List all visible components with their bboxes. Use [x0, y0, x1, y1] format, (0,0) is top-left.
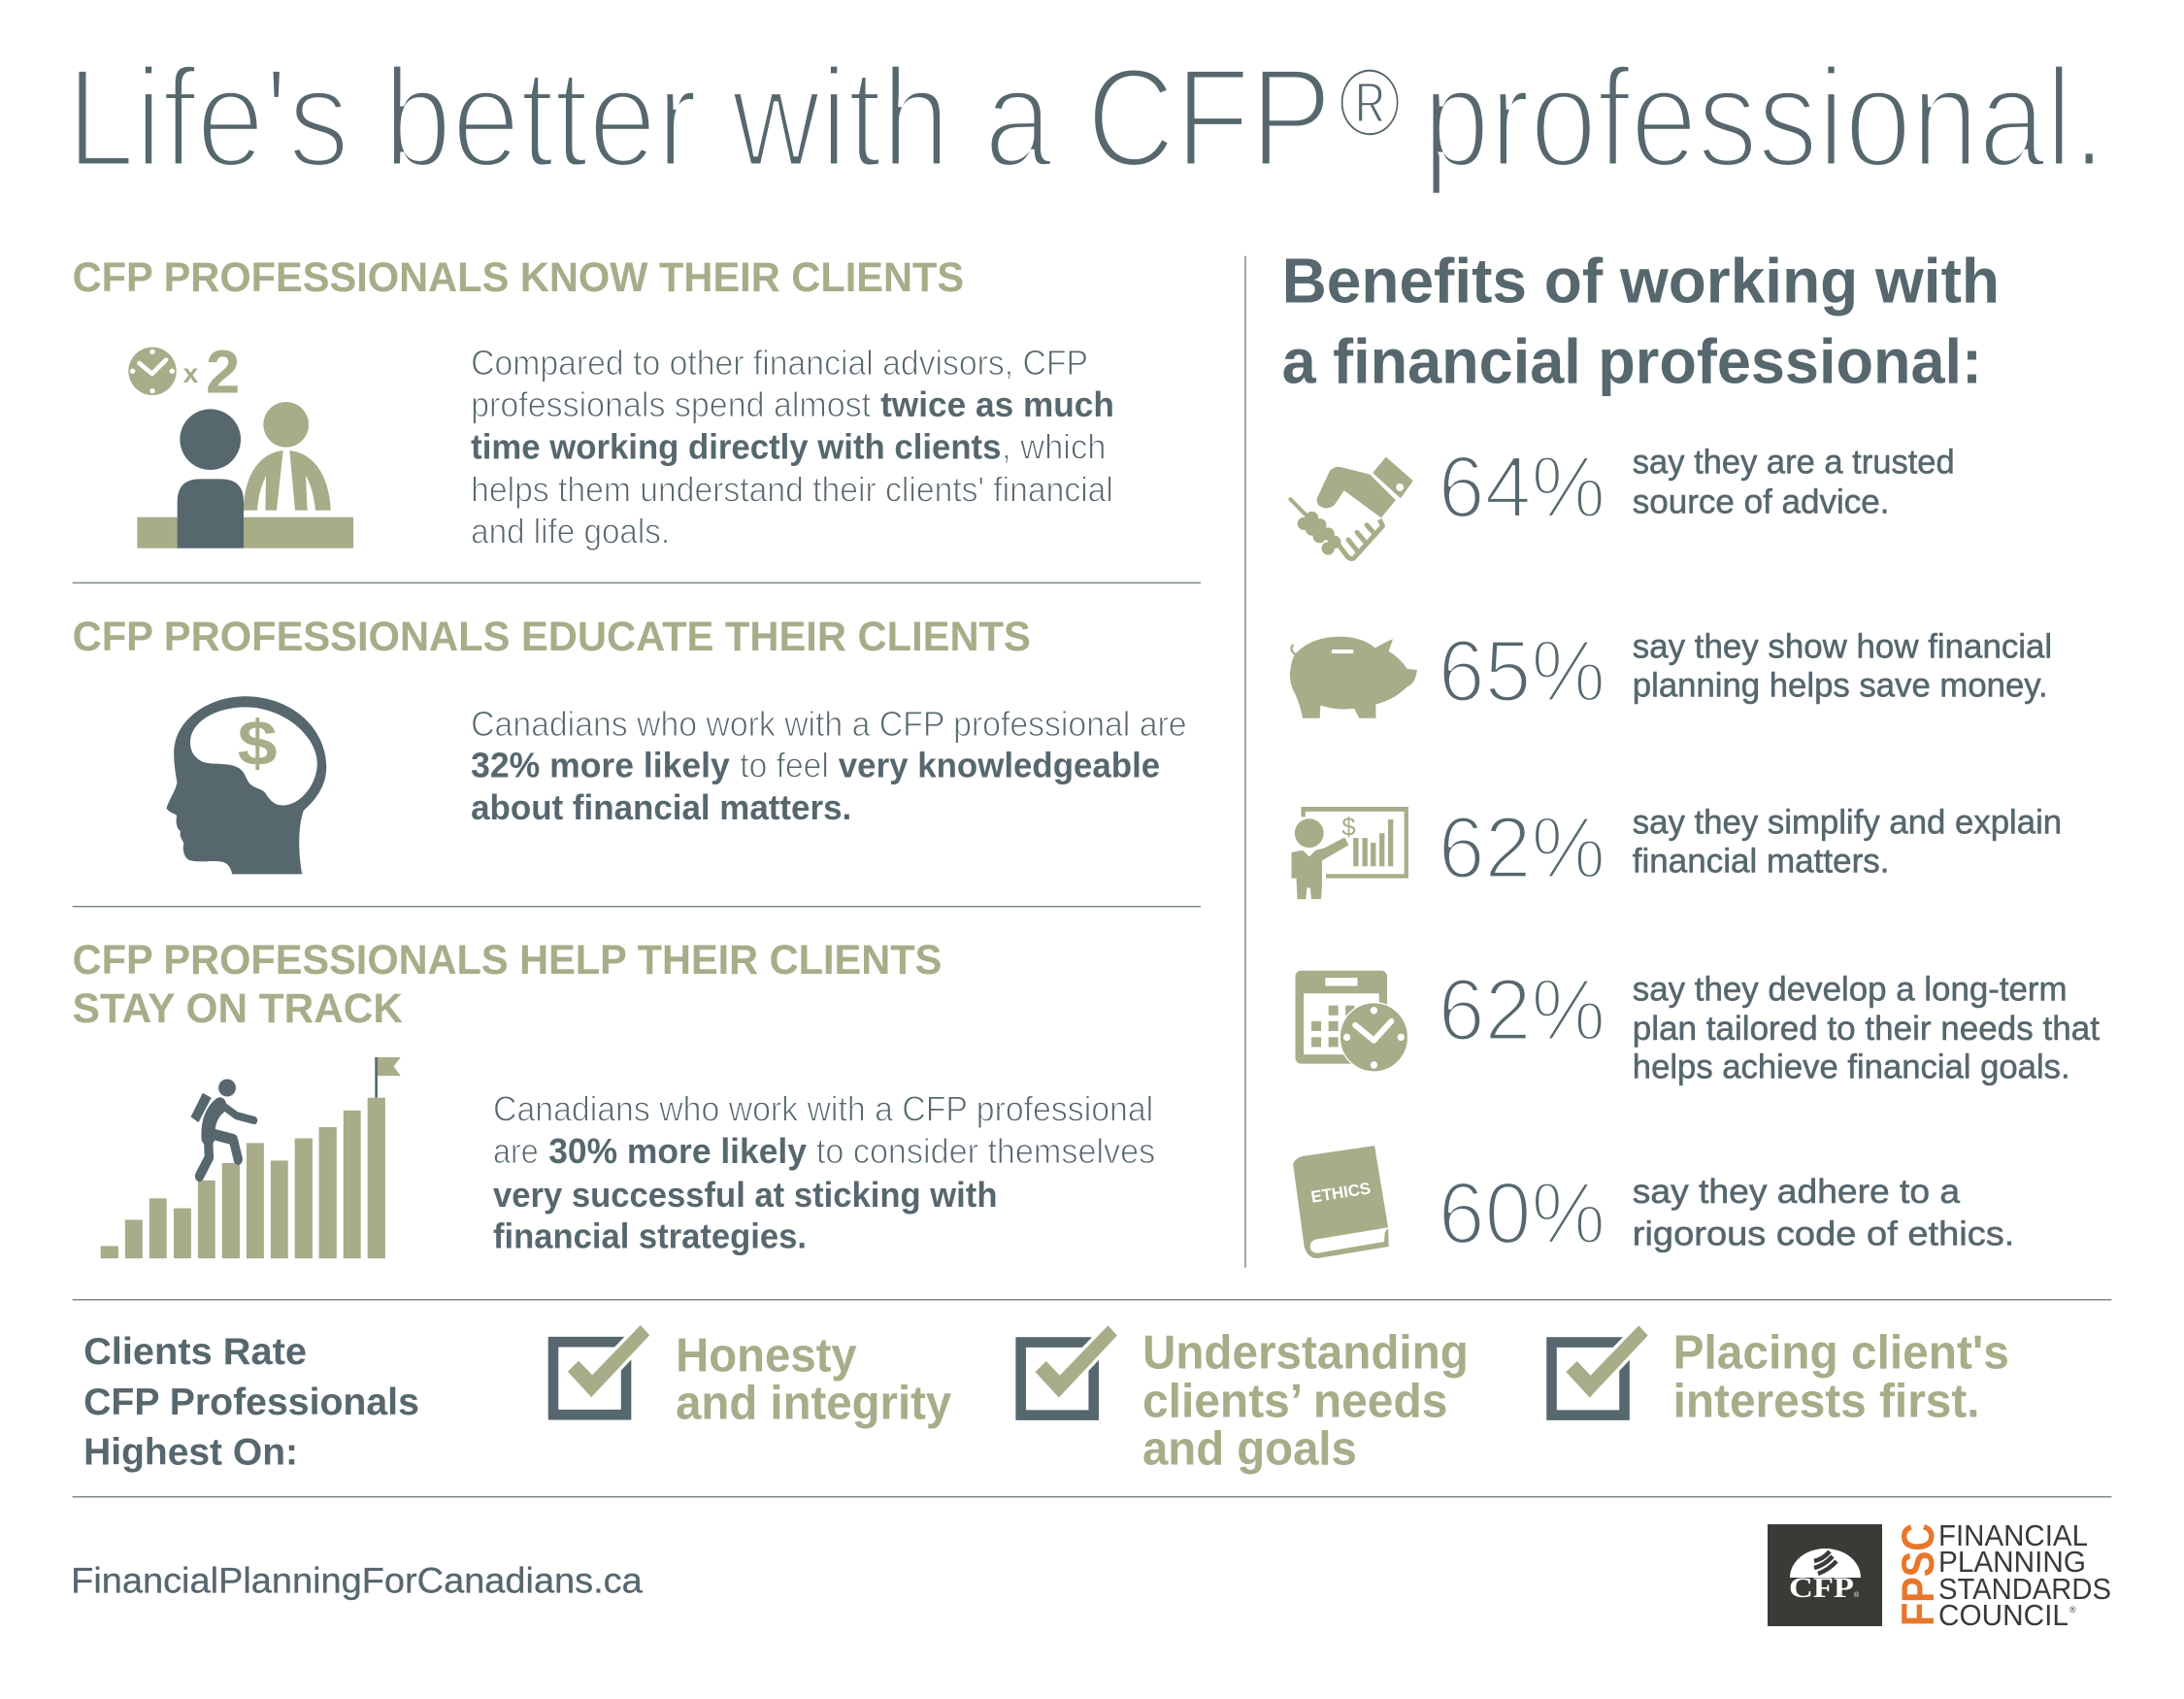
- icon: presenter at chart board: $: [1341, 814, 1356, 841]
- stat: long-term plan: [1295, 961, 2100, 1086]
- icon: checkbox: [548, 1325, 649, 1419]
- icon: advisor and client at desk: x: [183, 358, 199, 388]
- value: 62%: 62%: [1439, 961, 1605, 1058]
- text: know their clients: time working directly with clients: [471, 427, 1001, 467]
- value: 64%: 64%: [1439, 438, 1605, 535]
- text: honesty and integrity: Honesty: [676, 1330, 857, 1383]
- logo: CFP mark: ®: [1854, 1591, 1860, 1599]
- icon: handshake: [1290, 458, 1411, 558]
- value: 62%: 62%: [1439, 799, 1605, 896]
- label: code of ethics: say they adhere to a: [1633, 1173, 1961, 1211]
- title: ®: [1339, 49, 1401, 156]
- text: stay on track: [493, 1088, 1155, 1256]
- rating: understanding: [1015, 1325, 1469, 1476]
- text: stay on track: financial strategies.: [493, 1216, 807, 1256]
- text: honesty and integrity: and integrity: [676, 1377, 951, 1429]
- text: know their clients: , which: [1002, 427, 1106, 467]
- text: stay on track: are: [493, 1131, 539, 1171]
- label: code of ethics: [1633, 1173, 2014, 1253]
- value: 65%: 65%: [1439, 622, 1605, 719]
- text: understanding: [1142, 1327, 1469, 1476]
- icon: head with dollar sign: $: [238, 708, 278, 779]
- stat: saves money: [1290, 622, 2052, 719]
- icon: head with dollar sign: [166, 696, 326, 874]
- icon: ethics book: [1293, 1146, 1389, 1258]
- label: simplify and explain: financial matters.: [1633, 843, 1890, 881]
- label: clients rate: Highest On:: [83, 1431, 298, 1474]
- logo: FPSC wordmark: FPSC: [1892, 1523, 1943, 1626]
- text: know their clients: twice as much: [880, 384, 1114, 424]
- text: educate their clients: Canadians who work with a CFP professional are: [471, 704, 1187, 744]
- heading: know their clients: CFP PROFESSIONALS KNOW THEIR CLIENTS: [73, 254, 964, 300]
- label: long-term plan: plan tailored to their needs that: [1633, 1010, 2100, 1048]
- heading: benefits: Benefits of working with: [1282, 245, 2000, 316]
- label: long-term plan: say they develop a long-term: [1633, 970, 2068, 1008]
- icon: advisor and client at desk: [128, 339, 353, 549]
- text: client interests: interests first.: [1673, 1375, 1980, 1427]
- icon: checkbox: [1546, 1325, 1648, 1420]
- text: know their clients: helps them understand their clients' financial: [471, 469, 1113, 509]
- text: know their clients: and life goals.: [471, 511, 670, 550]
- text: client interests: Placing client's: [1673, 1327, 2009, 1380]
- logo: FPSC wordmark: STANDARDS: [1938, 1572, 2111, 1606]
- value: 60%: 60%: [1439, 1164, 1605, 1261]
- text: stay on track: Canadians who work with a CFP professional: [493, 1088, 1153, 1128]
- icon: ethics book: ETHICS: [1309, 1179, 1372, 1207]
- panel: benefits: [1282, 245, 2100, 1261]
- label: long-term plan: [1633, 970, 2100, 1086]
- heading: benefits: [1282, 245, 2000, 397]
- heading: stay on track: [73, 937, 942, 1031]
- icon: calendar and clock: [1295, 971, 1408, 1072]
- heading: stay on track: CFP PROFESSIONALS HELP THEIR CLIENTS: [73, 937, 942, 983]
- logo: FPSC wordmark: PLANNING: [1938, 1545, 2086, 1579]
- stat: simplify and explain: [1292, 799, 2062, 899]
- stat: code of ethics: [1293, 1146, 2014, 1261]
- logo: FPSC wordmark: [1892, 1518, 2111, 1632]
- title: Life's better with a CFP: [67, 38, 1332, 196]
- label: simplify and explain: say they simplify and explain: [1633, 803, 2062, 841]
- heading: benefits: a financial professional:: [1282, 326, 1982, 397]
- text: educate their clients: very knowledgeable: [839, 746, 1160, 785]
- text: know their clients: [471, 343, 1114, 550]
- logo: CFP mark: CFP: [1789, 1572, 1854, 1604]
- icon: presenter at chart board: [1292, 807, 1408, 899]
- footer url: FinancialPlanningForCanadians.ca: [71, 1561, 643, 1601]
- text: understanding: and goals: [1142, 1423, 1357, 1476]
- text: educate their clients: [471, 704, 1187, 827]
- text: educate their clients: about financial matters.: [471, 787, 851, 827]
- logo: FPSC wordmark: ®: [2069, 1605, 2076, 1615]
- label: saves money: say they show how financial: [1633, 628, 2052, 666]
- panel: highest ratings: [83, 1325, 2009, 1476]
- text: stay on track: very successful at sticking with: [493, 1175, 997, 1215]
- label: long-term plan: helps achieve financial goals.: [1633, 1049, 2070, 1086]
- icon: checkbox: [1015, 1325, 1117, 1420]
- panel: know their clients: [73, 254, 1114, 550]
- rating: honesty and integrity: [548, 1325, 951, 1429]
- text: know their clients: professionals spend almost: [471, 384, 871, 424]
- label: saves money: [1633, 628, 2052, 705]
- label: trusted source: [1633, 444, 1955, 520]
- text: educate their clients: to feel: [740, 746, 829, 785]
- rating: client interests: [1546, 1325, 2009, 1427]
- text: understanding: clients’ needs: [1142, 1375, 1447, 1427]
- label: clients rate: [83, 1330, 419, 1474]
- label: trusted source: source of advice.: [1633, 483, 1890, 520]
- text: stay on track: to consider themselves: [816, 1131, 1155, 1171]
- stat: trusted source: [1290, 438, 1955, 558]
- text: stay on track: 30% more likely: [548, 1131, 807, 1171]
- label: code of ethics: rigorous code of ethics.: [1633, 1216, 2014, 1253]
- icon: climber on rising bars with flag: [101, 1057, 401, 1258]
- panel: help clients stay on track: [73, 937, 1155, 1258]
- logo: FPSC wordmark: COUNCIL: [1938, 1598, 2068, 1632]
- label: trusted source: say they are a trusted: [1633, 444, 1955, 482]
- label: clients rate: CFP Professionals: [83, 1381, 419, 1423]
- text: educate their clients: 32% more likely: [471, 746, 730, 785]
- label: simplify and explain: [1633, 803, 2062, 881]
- icon: piggy bank: [1290, 637, 1417, 718]
- heading: educate their clients: CFP PROFESSIONALS EDUCATE THEIR CLIENTS: [73, 614, 1031, 659]
- label: clients rate: Clients Rate: [83, 1330, 307, 1373]
- logo: CFP mark: [1768, 1524, 1882, 1626]
- label: saves money: planning helps save money.: [1633, 667, 2048, 705]
- text: know their clients: Compared to other financial advisors, CFP: [471, 343, 1088, 383]
- heading: stay on track: STAY ON TRACK: [73, 985, 403, 1031]
- panel: educate their clients: [73, 614, 1187, 874]
- text: understanding: Understanding: [1142, 1327, 1469, 1380]
- icon: advisor and client at desk: 2: [206, 339, 240, 407]
- text: honesty and integrity: [676, 1330, 951, 1429]
- logo: FPSC wordmark: FINANCIAL: [1938, 1518, 2088, 1552]
- text: client interests: [1673, 1327, 2009, 1427]
